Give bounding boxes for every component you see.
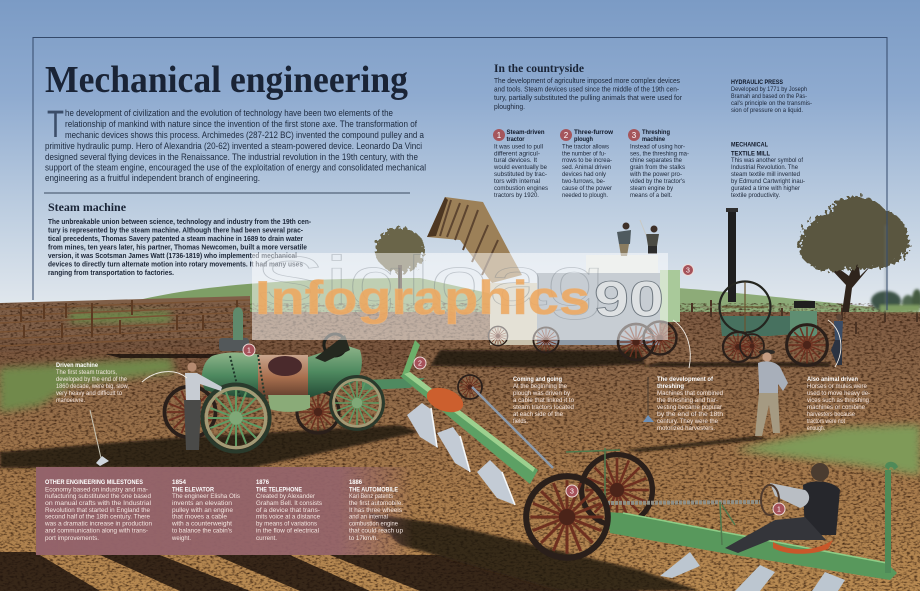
worker right — [640, 220, 659, 254]
watermark outline text: Sigloag — [255, 242, 605, 320]
plough shares — [407, 403, 515, 505]
item 3: threshing machine: machine — [642, 136, 665, 143]
body: and tools. Steam devices used since the middle of the 19th cen- — [494, 84, 679, 94]
caption: also animal driven: tractors were not — [807, 418, 845, 425]
note: mechanical textile mill: steam textile mill invented — [731, 171, 800, 178]
caption: development of threshing: motorized harvesters. — [657, 425, 715, 432]
milestones intro column: nufacturing substituted the one based — [45, 493, 151, 500]
callout arcs — [142, 320, 841, 382]
milestone: the telephone: THE TELEPHONE — [256, 486, 302, 494]
note: hydraulic press: Bramah and based on the Pas- — [731, 93, 807, 100]
item 3: threshing machine: Threshing — [642, 129, 670, 136]
item 1: steam-driven tractor: tors with internal — [494, 178, 541, 185]
item 1: steam-driven tractor: tractors by 1920. — [494, 192, 539, 199]
ground shadows — [0, 350, 830, 591]
item 3: threshing machine: with the power pro- — [629, 171, 682, 178]
number badge: 2 — [564, 131, 569, 140]
body: The unbreakable union between science, technology and industry from the 19th cen- — [48, 217, 311, 226]
milestone: the telephone: Created by Alexander — [256, 493, 315, 500]
milestone: the automobile: Karl Benz patents — [349, 493, 393, 500]
milestone: the telephone: of a device that trans- — [256, 507, 320, 514]
milestones intro column: port improvements. — [45, 535, 99, 542]
body: ploughing. — [494, 102, 525, 111]
note: mechanical textile mill: Industrial Revolution. The — [731, 164, 798, 171]
milestone: the automobile: the first automobile. — [349, 500, 403, 507]
note: hydraulic press: sion of pressure on a liquid. — [731, 107, 803, 114]
milestone: the automobile — [349, 479, 403, 542]
man by the tractor — [831, 314, 843, 365]
caption: driven machine: very heavy and difficult to — [56, 390, 122, 397]
item 1: steam-driven tractor: different agricul- — [494, 150, 540, 158]
caption: coming and going: steam tractors located — [513, 404, 574, 411]
panel: other engineering milestones — [36, 467, 414, 555]
distant trees — [871, 225, 920, 312]
body: devices to directly turn alternate motion into rotary movements. It had many uses — [48, 260, 303, 268]
intro text block: support of the steam engine, encouraged the use of the exploitation of energy and consolidated mechanical — [45, 162, 426, 172]
note: mechanical textile mill: MECHANICAL — [731, 142, 768, 148]
milestone: the telephone: in the flow of electrical — [256, 528, 319, 534]
intro text block: designed several flying devices in the Renaissance. The industrial revolution in the 19th century, with the — [45, 152, 418, 162]
body: from mines, ten years later, his partner, Thomas Newcomen, built a more versatile — [48, 242, 307, 252]
note: hydraulic press: cal's principle on the transmis- — [731, 100, 812, 107]
note: mechanical textile mill: TEXTILE MILL — [731, 150, 770, 158]
intro text block: mechanic devices shows this process. Archimedes (287-212 BC) invented the compound pulley and a — [65, 130, 424, 140]
milestone: the telephone — [256, 479, 322, 542]
milestones intro column: second half of the 18th century. There — [45, 514, 150, 520]
drop cap: T — [47, 104, 64, 146]
caption: development of threshing: threshing — [657, 383, 684, 390]
milestone: the automobile: combustion engine — [349, 520, 398, 528]
note: hydraulic press: Developed by 1771 by Joseph — [731, 86, 807, 93]
intro text block: primitive hydraulic pump. Hero of Alexandria (20-62) invented a steam-powered device. Leonardo Da Vinci — [45, 141, 422, 151]
milestone: the elevator — [171, 479, 240, 542]
badge 3 wheel — [566, 485, 578, 497]
item 1: steam-driven tractor: tractor — [506, 136, 525, 143]
item 1: steam-driven tractor: It was used to pull — [494, 144, 543, 150]
milestones intro column: Revolution that started in England the — [45, 507, 150, 514]
item 2: three-furrow plough: rrows to be increa- — [562, 157, 612, 164]
caption: also animal driven: machines or combine — [807, 404, 865, 411]
caption: also animal driven — [807, 376, 870, 432]
heading: Steam machine — [48, 200, 127, 214]
item 3: threshing machine: means of a belt. — [630, 192, 672, 199]
number badge: 3 — [632, 131, 637, 140]
badge 1 driver: 1 — [777, 506, 781, 514]
caption: coming and going: a cable that linked it to — [513, 397, 574, 404]
caption: development of threshing: vesting became popular — [657, 404, 722, 411]
caption: driven machine: manoeuvre. — [56, 397, 85, 404]
caption: development of threshing — [657, 376, 724, 432]
badge 2 plough: 2 — [418, 360, 422, 368]
white feet — [660, 552, 845, 591]
caption: driven machine: 1860 decade, were big, slow, — [56, 383, 129, 390]
milestone: the elevator: 1854 — [172, 479, 186, 486]
caption: driven machine: The first steam tractors, — [56, 369, 117, 376]
section: in the countryside — [494, 61, 682, 111]
milestone: the telephone: current. — [256, 535, 277, 542]
item 1: steam-driven tractor: tural devices. It — [494, 157, 537, 164]
item 1: steam-driven tractor: combustion engines — [494, 185, 549, 192]
milestones intro column: Economy based on industry and ma- — [45, 486, 148, 494]
tree centre — [375, 228, 425, 300]
note: mechanical textile mill: by Edmund Cartwright inau- — [731, 178, 805, 185]
caption: also animal driven: harvesters because — [807, 411, 855, 418]
fence left — [0, 300, 250, 346]
illustration: spade on left — [90, 410, 109, 466]
item 2: three-furrow plough: needed to plough. — [562, 192, 608, 199]
illustration: threshing machine — [427, 197, 680, 360]
milestone: the automobile: and an internal — [349, 514, 388, 520]
milestone: the telephone: mits voice at a distance — [256, 514, 320, 520]
milestones intro column — [44, 479, 153, 542]
caption: coming and going: fields. — [513, 418, 528, 425]
item 2: three-furrow plough: Three-furrow — [574, 129, 614, 136]
item 1: steam-driven tractor: would eventually be — [493, 164, 547, 171]
item 1: steam-driven tractor — [493, 129, 549, 199]
badge 1 tractor — [243, 344, 255, 356]
badge 2 plough — [414, 357, 426, 369]
milestones intro column: and communication along with trans- — [45, 528, 148, 534]
caption: development of threshing: century. They were the — [657, 418, 718, 425]
upright hook post — [885, 462, 898, 573]
milestones intro column: OTHER ENGINEERING MILESTONES — [45, 479, 143, 486]
section: steam machine — [48, 200, 311, 277]
milestone: the automobile: It has three wheels — [349, 507, 402, 514]
badge 3 wheel: 3 — [570, 488, 574, 496]
milestone: the elevator: that moves a cable — [172, 514, 228, 520]
intro text block: he development of civilization and the evolution of technology have been two elements of the — [65, 108, 393, 118]
item 2: three-furrow plough: plough — [574, 136, 593, 143]
grass patches — [0, 312, 920, 475]
item 3: threshing machine: steam engine by — [630, 185, 674, 192]
milestone: the elevator: weight. — [171, 535, 191, 542]
illustration: standing man — [755, 350, 788, 436]
hill left — [130, 278, 520, 320]
illustration: plough with driver — [400, 340, 898, 591]
worker left — [617, 222, 631, 256]
milestone: the automobile: to 17km/h. — [349, 535, 378, 542]
caption: also animal driven: vices such as threshing — [807, 397, 869, 404]
caption: also animal driven: enough. — [807, 425, 825, 432]
caption: development of threshing: by the end of the 18th — [657, 411, 724, 418]
body: version, it was Scotsman James Watt (1736-1819) who implemented mechanical — [48, 251, 297, 260]
item 3: threshing machine: chine separates the — [630, 157, 682, 164]
number badge: 1 — [497, 131, 502, 140]
man at the tractor — [184, 362, 222, 450]
body: tury is represented by the steam machine. Although there had been several prac- — [48, 226, 303, 234]
heading: In the countryside — [494, 61, 585, 75]
item 2: three-furrow plough: devices had only — [562, 171, 607, 178]
watermark number: 90 — [594, 271, 664, 327]
milestone: the elevator: with a counterweight — [171, 520, 232, 528]
caption: also animal driven: Also animal driven — [807, 376, 858, 383]
item 3: threshing machine: vided by the tractor's — [630, 178, 686, 185]
item 3: threshing machine — [628, 129, 689, 199]
milestone: the elevator: invents an elevation — [172, 500, 233, 507]
milestone: the telephone: 1876 — [256, 479, 269, 486]
caption: coming and going: plough was driven by — [513, 390, 571, 397]
note: mechanical textile mill — [731, 142, 805, 199]
intro text block: relationship of mankind with nature since the invention of the first stone axe. The transformation of — [65, 119, 417, 129]
watermark orange text: Infographics — [255, 271, 590, 324]
illustration: background steam tractor — [720, 208, 843, 365]
badge 1 driver — [773, 503, 785, 515]
note: hydraulic press: HYDRAULIC PRESS — [731, 79, 783, 86]
caption: development of threshing: Machines that combined — [657, 390, 723, 397]
title: Mechanical engineering — [45, 59, 408, 101]
milestone: the telephone: Graham Bell. It consists — [256, 500, 322, 507]
badges on illustration — [243, 264, 785, 515]
item 3: threshing machine: Instead of using hor- — [630, 144, 685, 150]
item 2: three-furrow plough: the number of fu- — [562, 150, 606, 158]
item 3: threshing machine: ses, the threshing ma- — [630, 150, 689, 158]
body: tury, partially substituted the pulling animals that were used for — [494, 93, 682, 102]
item 1: steam-driven tractor: substituted by trac- — [494, 171, 547, 178]
note: mechanical textile mill: This was another symbol of — [731, 157, 803, 164]
caption: driven machine — [56, 362, 129, 404]
body: ranging from transportation to factories. — [48, 268, 174, 277]
note: hydraulic press — [731, 79, 812, 114]
body: tical precedents, Thomas Savery patented a steam machine in 1689 to drain water — [48, 234, 303, 243]
item 2: three-furrow plough — [560, 129, 614, 199]
illustration: green steam tractor — [164, 307, 425, 452]
milestone: the elevator: to balance the cabin's — [172, 528, 232, 534]
tree right — [799, 196, 909, 312]
milestones intro column: on manual crafts with the Industrial — [45, 500, 151, 507]
frame lines — [33, 38, 887, 310]
milestone: the automobile: that could reach up — [349, 528, 403, 534]
milestone: the telephone: by means of variations — [256, 520, 317, 528]
milestone: the elevator: THE ELEVATOR — [172, 486, 214, 494]
illustration: shovel — [643, 377, 654, 422]
item 3: threshing machine: grain from the stalks — [630, 164, 686, 171]
driver — [725, 463, 840, 554]
body — [494, 76, 682, 111]
item 2: three-furrow plough: cause of the power — [562, 185, 613, 192]
item 2: three-furrow plough: The tractor allows — [562, 144, 610, 150]
watermark band — [252, 242, 668, 340]
milestone: the elevator: The engineer Elisha Otis — [172, 493, 240, 500]
caption: coming and going: At the beginning the — [513, 383, 567, 390]
caption: driven machine: Driven machine — [56, 362, 98, 369]
intro text block — [45, 104, 426, 183]
item 2: three-furrow plough: sed. Animal driven — [562, 164, 611, 171]
note: mechanical textile mill: textile productivity. — [731, 192, 780, 199]
item 1: steam-driven tractor: Steam-driven — [506, 129, 544, 136]
caption: coming and going: at each side of the — [513, 411, 563, 418]
milestone: the automobile: 1886 — [349, 479, 362, 486]
ploughed soil — [0, 296, 920, 591]
caption: development of threshing: The development of — [657, 376, 714, 383]
body: The development of agriculture imposed more complex devices — [494, 76, 680, 85]
caption: coming and going — [513, 376, 574, 425]
fence right — [692, 300, 917, 334]
badge 1 tractor: 1 — [247, 348, 251, 354]
badge 3 thresher — [682, 264, 694, 276]
intro text block: engineering as a fruitful independent branch of engineering. — [45, 173, 260, 183]
note: mechanical textile mill: gurated a time with higher — [731, 185, 801, 192]
caption: driven machine: developed by the end of the — [56, 376, 127, 383]
body — [48, 217, 311, 277]
caption: development of threshing: the threshing and har- — [657, 397, 718, 404]
caption: also animal driven: used to move heavy de- — [807, 390, 870, 397]
caption: also animal driven: Horses or mules were — [807, 383, 867, 390]
milestones intro column: was a dramatic increase in production — [44, 520, 153, 528]
milestone: the automobile: THE AUTOMOBILE — [349, 486, 398, 494]
caption: coming and going: Coming and going — [513, 376, 562, 383]
item 2: three-furrow plough: two-furrows, be- — [562, 178, 605, 185]
badge 3 thresher: 3 — [686, 268, 690, 274]
milestone: the elevator: pulley with an engine — [172, 507, 234, 514]
